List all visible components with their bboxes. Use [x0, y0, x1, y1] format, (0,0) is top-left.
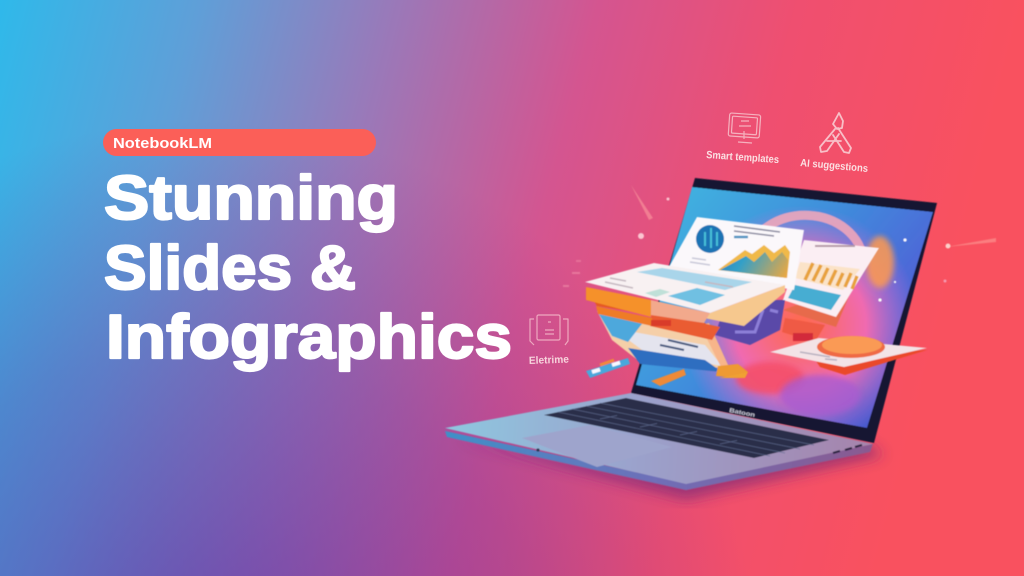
floating card — [770, 336, 927, 375]
centre machinery block — [715, 300, 825, 345]
title: Slides & — [104, 234, 356, 303]
badge: NotebookLM — [103, 129, 376, 156]
label: AI suggestions: AI suggestions — [800, 157, 869, 175]
laptop screen — [636, 187, 933, 445]
trackpad — [522, 425, 672, 467]
laptop base — [445, 393, 873, 490]
title: Infographics — [106, 303, 512, 372]
icon: AI suggestions compass — [820, 113, 851, 153]
front slide stack — [585, 263, 785, 340]
laptop — [445, 178, 937, 500]
label: Smart templates: Smart templates — [706, 149, 780, 166]
slide: area chart — [669, 217, 804, 290]
sparks and particles — [563, 185, 996, 389]
small debris chips — [586, 358, 748, 386]
floating slides — [585, 217, 927, 386]
lower slide layer — [597, 311, 748, 378]
badge: NotebookLM: NotebookLM — [113, 136, 212, 152]
slide: bar chart — [783, 240, 879, 327]
laptop lid — [631, 178, 937, 443]
icon: smart templates monitor — [728, 113, 761, 143]
icon: left document — [530, 315, 568, 345]
ports — [833, 445, 862, 453]
title — [104, 164, 512, 372]
title: Stunning — [104, 164, 398, 233]
laptop shadow — [455, 438, 885, 500]
laptop brand text: Batoon — [729, 408, 756, 419]
label: Eletrime: Eletrime — [529, 354, 569, 367]
keyboard — [544, 398, 829, 458]
